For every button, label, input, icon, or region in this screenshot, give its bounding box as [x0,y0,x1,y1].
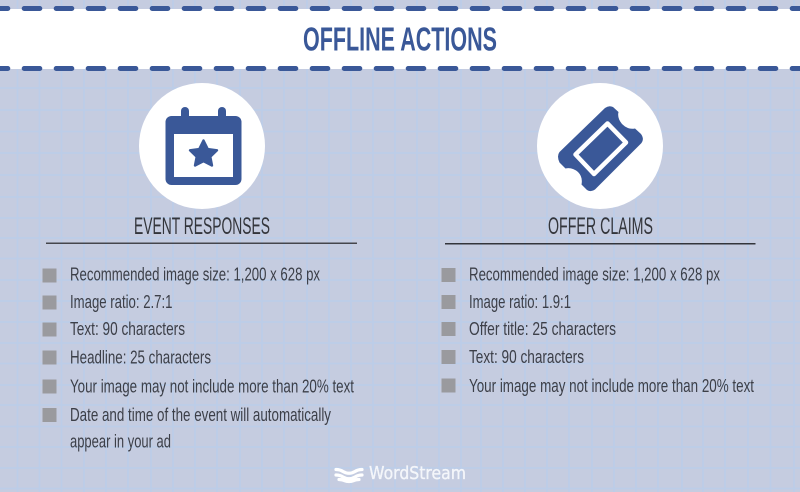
list: event responses: appear in your ad [70,430,171,452]
icon: calendar with star [139,83,265,209]
panel: event responses [42,83,357,452]
list: offer claims [442,264,754,396]
heading: offer claims: OFFER CLAIMS [548,213,653,240]
list: event responses [42,264,354,452]
list: event responses: Headline: 25 characters [70,346,211,368]
list: event responses: Your image may not include more than 20% text [70,376,354,396]
list: event responses: Image ratio: 2.7:1 [70,291,172,312]
panel: offer claims [442,83,756,396]
title banner [0,8,800,69]
list: event responses: Text: 90 characters [70,318,185,339]
icon: ticket [537,83,663,209]
list: offer claims: Offer title: 25 characters [469,318,616,339]
logo: WordStream [336,463,466,484]
heading: event responses: EVENT RESPONSES [134,213,270,240]
logo: WordStream: WordStream [369,463,466,484]
icon: waves [336,470,362,482]
list: event responses: Recommended image size: 1,200 x 628 px [70,264,321,284]
list: offer claims: Image ratio: 1.9:1 [469,291,571,312]
title: OFFLINE ACTIONS [303,20,497,58]
list: offer claims: Text: 90 characters [469,346,584,367]
list: event responses: Date and time of the event will automatically [70,404,332,425]
